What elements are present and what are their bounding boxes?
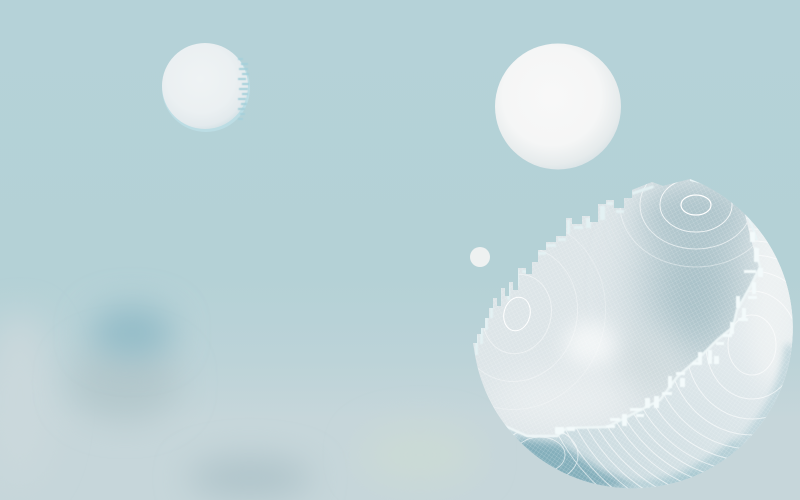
front shell mesh <box>508 214 793 488</box>
sphere: small cut-away top left <box>162 43 250 132</box>
bright top right rim <box>690 179 754 230</box>
sphere: plain white top right <box>495 44 621 170</box>
stepped back rim <box>475 185 654 355</box>
blurred background shapes <box>0 306 480 498</box>
sphere: tiny white ball <box>470 247 490 267</box>
sphere: large wireframe hemisphere <box>473 179 793 488</box>
sphere mesh edge <box>238 58 249 120</box>
interior bowl <box>473 179 793 435</box>
stepped front rim <box>498 232 763 436</box>
